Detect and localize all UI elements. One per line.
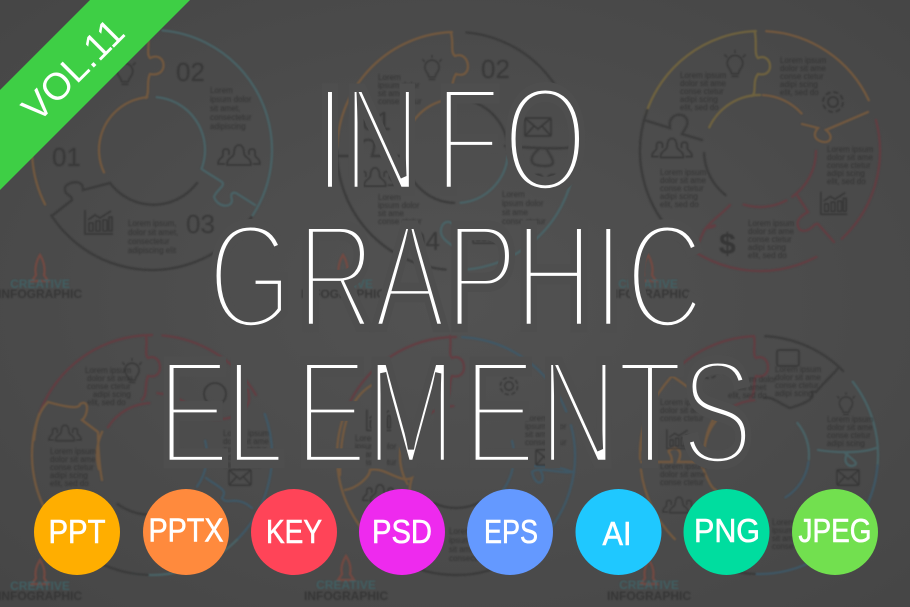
text blocks: sit ame [502, 208, 528, 217]
text blocks: Lorem ipsum [827, 145, 874, 154]
badge: PPT [34, 489, 120, 575]
text blocks: dolor sit ame [827, 153, 873, 162]
text blocks: Lorem ipsum [85, 366, 132, 375]
logo [0, 560, 82, 603]
circular diagram 4 (bottom left) [0, 285, 322, 607]
text blocks: conse ctetur [378, 97, 422, 106]
text blocks: sit ame [449, 545, 475, 554]
step numbers: 04 [411, 226, 440, 256]
text blocks: elit, sed do [680, 103, 719, 112]
text blocks: ipsum dolor [735, 375, 777, 384]
logo: CREATIVE [619, 578, 679, 592]
text blocks: adipi scing [827, 169, 865, 178]
logo: INFOGRAPHIC [304, 589, 388, 603]
badge: AI [576, 489, 662, 575]
icons: $ [719, 228, 736, 261]
badge: KEY: KEY [266, 513, 322, 550]
logo: INFOGRAPHIC [0, 589, 82, 603]
text blocks: Lorem ipsum [660, 168, 707, 177]
logo: INFOGRAPHIC [301, 287, 385, 301]
corner ribbon [0, 0, 190, 190]
text blocks: sit amet [738, 383, 767, 392]
text blocks: Lorem ipsum [780, 56, 827, 65]
text blocks: dolor sit amet, [128, 228, 178, 237]
badge: AI: AI [602, 515, 632, 552]
text blocks: Lorem [210, 86, 233, 95]
text blocks: elit, sed do [827, 177, 866, 186]
text blocks: dolor sit ame [775, 373, 821, 382]
step numbers: 01 [52, 142, 81, 172]
text blocks: dolor sit ame [827, 423, 873, 432]
badge: KEY [251, 489, 337, 575]
format badges [34, 489, 878, 575]
text blocks: Lorem [502, 190, 525, 199]
badge: PNG [684, 489, 770, 575]
step numbers [52, 57, 215, 239]
text blocks: conse ctetur [775, 381, 819, 390]
text blocks: conse ctetur [748, 235, 792, 244]
circular diagram 2 (top centre) [301, 17, 590, 301]
text blocks: Lorem ipsum [775, 365, 822, 374]
text blocks: elit, sed do [660, 200, 699, 209]
text blocks: ipsum dolor [355, 442, 397, 451]
text blocks: adipi scing [223, 453, 261, 462]
text blocks [355, 414, 567, 563]
title: GRAPHIC: GRAPHIC [208, 193, 704, 360]
text blocks: Lorem ipsum [660, 462, 707, 471]
step numbers: 02 [481, 54, 510, 84]
ribbon label: VOL.11 [14, 11, 133, 130]
logo: INFOGRAPHIC [0, 287, 82, 301]
circular diagram 3 (top right) [590, 0, 910, 321]
text blocks: adipiscing [210, 122, 246, 131]
text blocks: dolor sit ame [660, 176, 706, 185]
icons [663, 350, 859, 513]
icons [49, 358, 251, 485]
text blocks [660, 365, 874, 551]
text blocks: ipsum dolor [210, 95, 252, 104]
badge: PPT: PPT [48, 513, 106, 550]
logo: INFOGRAPHIC [606, 287, 690, 301]
step numbers: 03 [531, 168, 560, 198]
text blocks: adipi scing [93, 390, 131, 399]
badge: PSD [359, 489, 445, 575]
icons [85, 58, 260, 234]
text blocks: consectetur [128, 237, 170, 246]
badge: EPS: EPS [484, 513, 538, 550]
text blocks: dolor sit ame [748, 227, 794, 236]
text blocks: elit, sed do [50, 479, 89, 488]
text blocks: conse ctetur [50, 463, 94, 472]
text blocks: ipsum dolor [772, 526, 814, 535]
text blocks: consectetur [525, 438, 567, 447]
text blocks: dolor sit ame [660, 470, 706, 479]
text blocks [128, 86, 252, 255]
text blocks: adipi scing [827, 439, 865, 448]
text blocks: Lorem [722, 367, 745, 376]
text blocks: dolor sit ame [660, 406, 706, 415]
text blocks: Lorem ipsum [660, 398, 707, 407]
text blocks: elit, sed do [87, 398, 126, 407]
icons [363, 377, 558, 501]
text blocks: conse ctetur [660, 184, 704, 193]
text blocks: conse ctetur [87, 382, 131, 391]
logo [606, 255, 690, 301]
circular diagram 6 (bottom right) [591, 287, 910, 607]
text blocks: ipsum dolor [449, 536, 491, 545]
badge: PSD: PSD [372, 513, 432, 550]
title: ELEMENTS: ELEMENTS [158, 329, 753, 496]
badge: PPTX [143, 489, 229, 575]
text blocks: consectetur [210, 113, 252, 122]
text blocks: conse ctetur [827, 161, 871, 170]
text blocks: ipsum dolor [502, 199, 544, 208]
text blocks: Lorem ipsum [680, 71, 727, 80]
logo: CREATIVE [618, 277, 678, 291]
logo [607, 560, 691, 603]
text blocks: Lorem ipsum [748, 219, 795, 228]
badge: JPEG [792, 489, 878, 575]
logo [0, 255, 82, 301]
text blocks: dolor sit ame [50, 455, 96, 464]
text blocks: conse ctetur [780, 72, 824, 81]
icons [652, 50, 847, 261]
logo: INFOGRAPHIC [607, 589, 691, 603]
text blocks: adipi scing [660, 192, 698, 201]
logo [301, 255, 385, 301]
text blocks: Lorem [449, 527, 472, 536]
text blocks: dolor sit ame [680, 79, 726, 88]
text blocks: Lorem [772, 518, 795, 527]
text blocks: consectetur [449, 554, 491, 563]
text blocks: Lorem ipsum, [128, 219, 176, 228]
text blocks: adipi scing [780, 80, 818, 89]
logo: CREATIVE [316, 578, 376, 592]
text blocks: Lorem [378, 193, 401, 202]
text blocks: conse ctetur [378, 217, 422, 226]
step numbers: 02 [176, 57, 205, 87]
icons [356, 55, 551, 243]
text blocks: elit, sed do [223, 461, 262, 470]
badge: PNG: PNG [694, 512, 760, 549]
text blocks: dolor sit ame [87, 374, 133, 383]
badge: JPEG: JPEG [798, 512, 872, 549]
step numbers [362, 54, 560, 256]
text blocks: sit ame [525, 430, 551, 439]
text blocks: adipi scing [775, 389, 813, 398]
text blocks: sit ame [378, 209, 404, 218]
title: INFO: INFO [315, 56, 587, 223]
text blocks: sit amet, [210, 104, 240, 113]
text blocks: Lorem [355, 434, 378, 443]
text blocks: elit, sed do [728, 391, 767, 400]
text blocks: conse ctetur [502, 217, 546, 226]
text blocks: conse ctetur [660, 478, 704, 487]
text blocks: conse ctetur [772, 542, 816, 551]
text blocks: adipiscing elit [128, 246, 177, 255]
badge: EPS [467, 489, 553, 575]
text blocks: dolor sit ame [780, 64, 826, 73]
text blocks: sit ame [355, 450, 381, 459]
text blocks: ipsum dolor [525, 422, 567, 431]
text blocks [378, 73, 546, 226]
text blocks: elit, sed do [780, 88, 819, 97]
step numbers: 03 [186, 209, 215, 239]
text blocks: adipi scing [748, 243, 786, 252]
text blocks: Lorem ipsum [223, 429, 270, 438]
text blocks: adipi scing [50, 471, 88, 480]
text blocks: adipi scing [680, 95, 718, 104]
text blocks: sit ame [772, 534, 798, 543]
text blocks: conse ctetur [827, 431, 871, 440]
text blocks: sit ame [378, 89, 404, 98]
text blocks: conse ctetur [660, 414, 704, 423]
logo: CREATIVE [313, 277, 373, 291]
step numbers: 01 [362, 106, 391, 136]
text blocks: Lorem ipsum [827, 415, 874, 424]
text blocks: Lorem [525, 414, 548, 423]
text blocks: ipsum dolor [378, 201, 420, 210]
circular diagram 1 (top left) [0, 0, 319, 317]
logo: CREATIVE [10, 579, 70, 593]
circular diagram 5 (bottom centre) [289, 289, 623, 607]
text blocks: elit, sed do [748, 251, 787, 260]
text blocks: conse ctetur [680, 87, 724, 96]
text blocks: consectetur [355, 458, 397, 467]
badge: PPTX: PPTX [148, 512, 224, 548]
text blocks [660, 56, 874, 260]
text blocks: Lorem ipsum [50, 447, 97, 456]
text blocks [50, 366, 270, 488]
text blocks: ipsum dolor [378, 81, 420, 90]
logo: CREATIVE [10, 277, 70, 291]
text blocks: Lorem [378, 73, 401, 82]
text blocks: dolor sit ame [223, 437, 269, 446]
text blocks: conse ctetur [223, 445, 267, 454]
logo [304, 556, 388, 603]
